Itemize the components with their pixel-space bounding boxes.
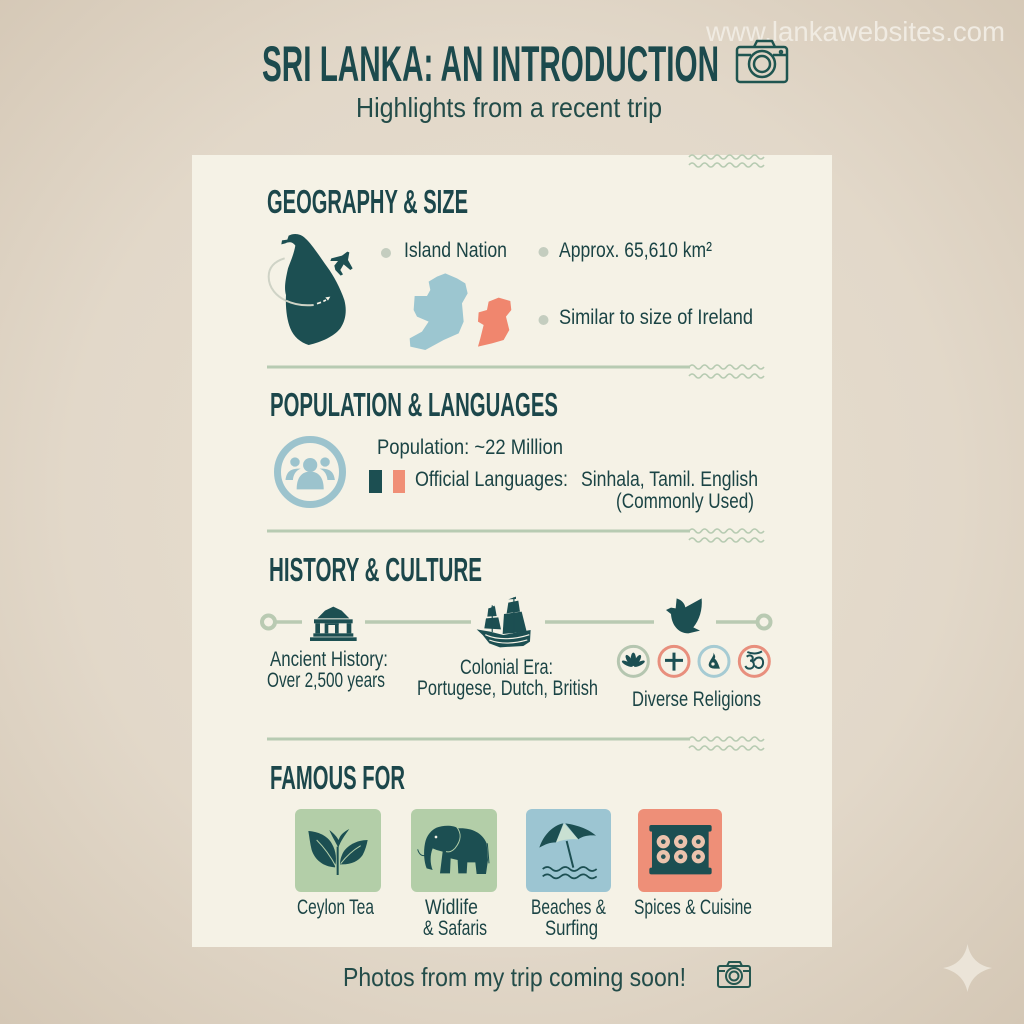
icon: lotus badge	[618, 646, 648, 676]
timeline	[262, 616, 770, 628]
heading: geography: GEOGRAPHY & SIZE	[267, 183, 468, 220]
label: beaches: Surfing	[545, 916, 598, 940]
label: spices: Spices & Cuisine	[634, 895, 752, 919]
label: beaches	[531, 895, 606, 940]
panel: history and culture	[262, 551, 770, 711]
panel: population and languages	[270, 386, 758, 513]
map: Sri Lanka with flight path	[269, 234, 353, 345]
panel: famous for	[270, 759, 752, 940]
divider	[267, 365, 764, 378]
bullet: island nation: Island Nation	[404, 238, 507, 262]
map: Ireland comparison blue	[410, 273, 468, 350]
icon: cross badge	[659, 646, 689, 676]
icon: temple	[310, 607, 357, 641]
tile: beaches	[526, 809, 611, 892]
heading: population: POPULATION & LANGUAGES	[270, 386, 558, 423]
icon: sparkle	[943, 944, 992, 992]
flag swatches	[369, 470, 405, 493]
icon: people	[278, 440, 342, 504]
label: wildlife	[423, 895, 487, 940]
footer text: Photos from my trip coming soon!	[343, 962, 686, 992]
text: diverse religions: Diverse Religions	[632, 687, 761, 711]
icon: ship	[477, 597, 531, 647]
label: ceylon tea: Ceylon Tea	[297, 895, 374, 919]
tile: ceylon tea	[295, 809, 381, 892]
text: ancient history: Ancient History:	[270, 647, 388, 671]
icon: dove	[666, 598, 702, 633]
languages label: Official Languages:	[415, 467, 568, 491]
population text: Population: ~22 Million	[377, 435, 563, 459]
label: wildlife: & Safaris	[423, 916, 487, 940]
tile: wildlife	[411, 809, 497, 892]
icon: om badge	[739, 646, 769, 676]
panel: geography and size	[267, 183, 753, 350]
subtitle: Highlights from a recent trip	[356, 92, 662, 123]
languages note: (Commonly Used)	[616, 489, 754, 513]
bullet: area: Approx. 65,610 km²	[559, 238, 712, 262]
text: colonial era	[417, 655, 598, 700]
bullet: island nation	[381, 238, 507, 262]
tile: spices	[638, 809, 722, 892]
text: colonial era: Portugese, Dutch, British	[417, 676, 598, 700]
text: ancient history	[267, 647, 388, 692]
text: ancient history: Over 2,500 years	[267, 668, 385, 692]
divider	[267, 737, 764, 750]
title: SRI LANKA: AN INTRODUCTION	[262, 36, 719, 92]
panel: main card	[192, 155, 832, 947]
icon: flame badge	[699, 646, 729, 676]
languages list: Sinhala, Tamil. English	[581, 467, 758, 491]
map: Ireland comparison coral	[478, 298, 511, 347]
icon: footer camera	[718, 962, 750, 987]
bullet: size comparison: Similar to size of Ireland	[559, 305, 753, 329]
watermark: www.lankawebsites.com	[705, 16, 1005, 47]
text: colonial era: Colonial Era:	[460, 655, 553, 679]
heading: history: HISTORY & CULTURE	[269, 551, 482, 588]
divider	[267, 529, 764, 542]
decorative waves top	[689, 155, 764, 167]
label: wildlife: Widlife	[425, 895, 478, 919]
icon: camera	[737, 41, 787, 82]
label: beaches: Beaches &	[531, 895, 606, 919]
heading: famous for: FAMOUS FOR	[270, 759, 405, 796]
